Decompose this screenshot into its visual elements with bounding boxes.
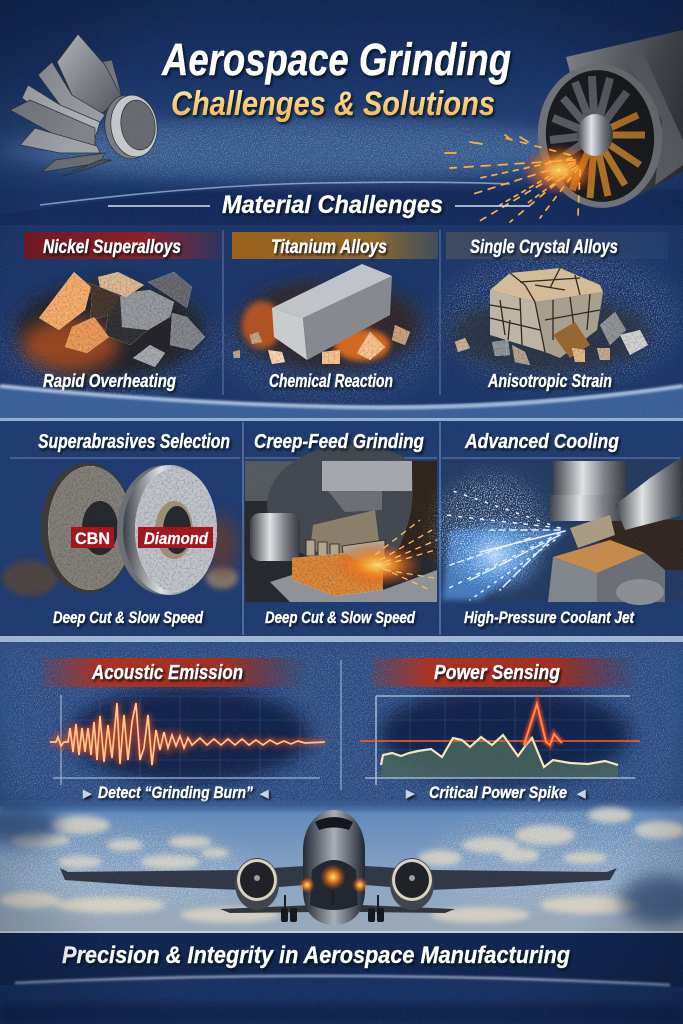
panel: material challenges [0,225,683,405]
card: acoustic emission: Acoustic Emission [91,662,243,684]
icon: jet engine with sparks [445,30,683,222]
footer band [0,932,683,1024]
card: creep-feed grinding: Deep Cut & Slow Speed [265,609,416,627]
card: nickel superalloys [15,232,222,391]
card: superabrasives selection [2,431,238,627]
engines [235,858,434,910]
caption: detect grinding burn: ▶ [82,788,92,800]
lights and gear [281,864,384,922]
header band [0,0,683,215]
caption: detect grinding burn: Detect “Grinding Burn” [98,784,254,802]
chart: acoustic waveform [50,695,325,785]
card: single crystal alloys: Anisotropic Strain [487,371,612,391]
card: nickel superalloys: Rapid Overheating [43,371,176,391]
card: power sensing [360,658,640,802]
icon: turbine blade ring [10,34,161,177]
title [161,34,511,123]
card: nickel superalloys: Nickel Superalloys [43,237,181,258]
card: superabrasives selection: Superabrasives Selection [38,431,230,453]
card: advanced cooling: Advanced Cooling [464,431,619,453]
card: titanium alloys: Chemical Reaction [269,371,393,391]
caption: critical power spike: ▶ [405,788,415,800]
airplane [60,810,617,925]
label: CBN: CBN [75,529,110,548]
sparks [445,135,600,222]
card: advanced cooling [435,431,683,627]
title: Aerospace Grinding [161,34,511,85]
chart: power spike [360,696,640,785]
panel: monitoring [0,642,683,812]
panel: grinding solutions [0,421,683,635]
icon: diamond wheel [117,465,217,595]
card: single crystal alloys [446,232,668,391]
footer band: Precision & Integrity in Aerospace Manufacturing [62,942,570,969]
section heading: material challenges: Material Challenges [222,191,443,219]
wings [60,866,617,913]
coolant spray [435,475,568,600]
card: titanium alloys: Titanium Alloys [271,237,387,258]
card: creep-feed grinding: Creep-Feed Grinding [254,431,424,453]
label: Diamond: Diamond [144,529,209,548]
title: Challenges & Solutions [171,85,495,123]
icon: CBN wheel [41,463,133,593]
card: advanced cooling: High-Pressure Coolant Jet [464,609,635,627]
card: single crystal alloys: Single Crystal Alloys [470,237,618,258]
caption: critical power spike: ◀ [576,788,586,800]
section divider band [0,385,683,422]
fuselage [303,810,365,925]
divider band [0,636,683,642]
sky with clouds [0,802,683,932]
card: titanium alloys [232,232,438,391]
card: acoustic emission [44,658,325,802]
card: power sensing: Power Sensing [434,662,560,684]
card: creep-feed grinding [245,431,437,627]
card: superabrasives selection: Deep Cut & Slow Speed [53,609,204,627]
caption: critical power spike: Critical Power Spike [429,784,567,802]
caption: detect grinding burn: ◀ [259,788,269,800]
